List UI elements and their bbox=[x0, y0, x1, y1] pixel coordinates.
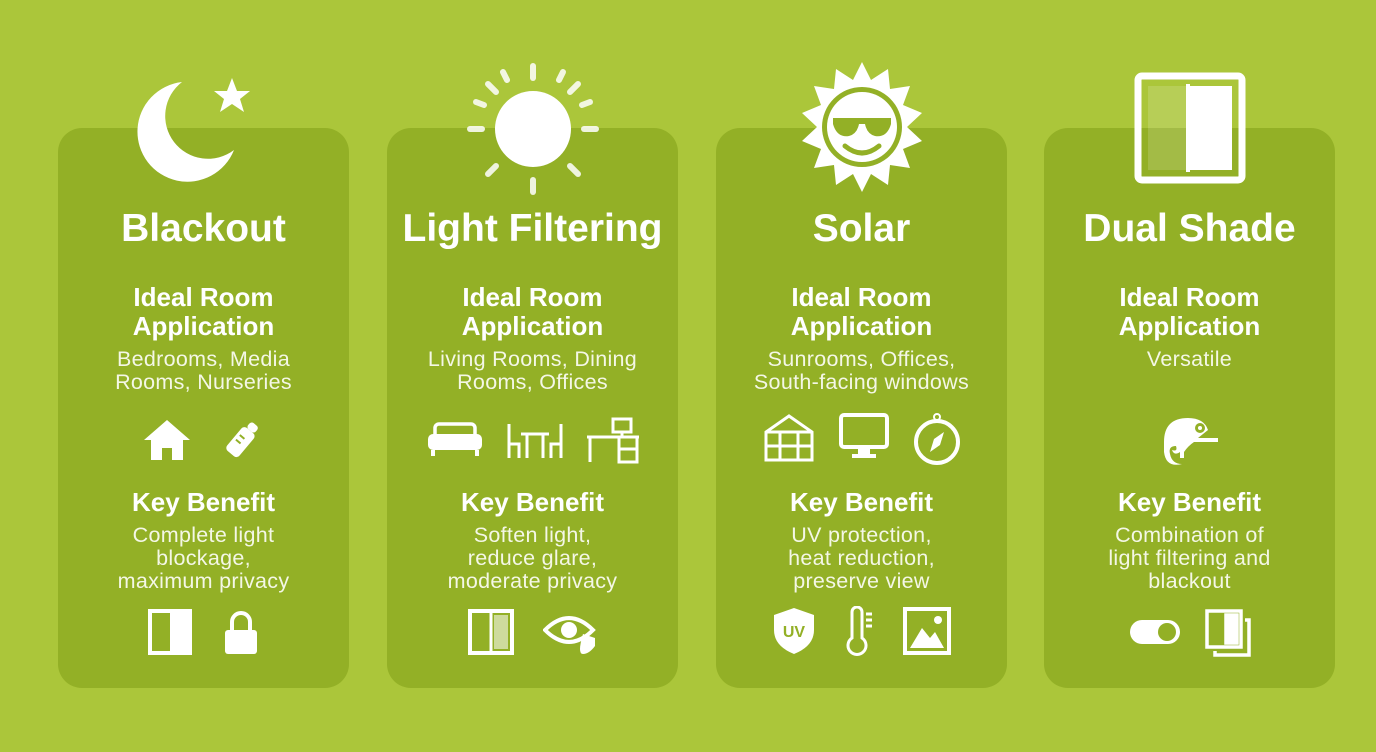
title: Dual Shade: Dual Shade bbox=[1083, 207, 1296, 250]
text: benefit: Soften light, bbox=[474, 523, 591, 547]
heading: ideal room: Application bbox=[133, 311, 274, 341]
text: rooms: Bedrooms, Media bbox=[117, 347, 290, 371]
heading: ideal room bbox=[1119, 282, 1260, 341]
icons: uv, thermometer, picture bbox=[774, 606, 951, 656]
heading: ideal room bbox=[791, 282, 932, 341]
icons: uv, thermometer, picture: UV bbox=[782, 624, 805, 641]
icon: sun bbox=[467, 63, 599, 195]
text: benefit bbox=[448, 523, 617, 593]
icons: greenhouse, monitor, compass bbox=[764, 413, 960, 465]
text: benefit: preserve view bbox=[793, 569, 930, 593]
text: benefit: light filtering and bbox=[1108, 546, 1271, 570]
icon: dual window bbox=[1134, 72, 1246, 184]
text: benefit: blackout bbox=[1148, 569, 1231, 593]
panel: dual shade bbox=[1044, 128, 1335, 688]
column: Light Filtering bbox=[387, 63, 678, 688]
column: Solar bbox=[716, 62, 1007, 688]
text: rooms bbox=[115, 347, 292, 394]
icon: chameleon bbox=[1164, 418, 1218, 465]
text: benefit: heat reduction, bbox=[788, 546, 935, 570]
heading: ideal room: Ideal Room bbox=[462, 282, 603, 312]
panel: light filtering bbox=[387, 128, 678, 688]
text: benefit: Complete light bbox=[133, 523, 274, 547]
text: rooms: Rooms, Nurseries bbox=[115, 370, 292, 394]
heading: ideal room: Ideal Room bbox=[791, 282, 932, 312]
text: rooms: South-facing windows bbox=[754, 370, 969, 394]
icons: shade, lock bbox=[148, 609, 257, 655]
heading: ideal room: Application bbox=[462, 311, 603, 341]
heading: ideal room bbox=[462, 282, 603, 341]
heading: ideal room: Ideal Room bbox=[133, 282, 274, 312]
heading: ideal room: Application bbox=[791, 311, 932, 341]
heading: key benefit: Key Benefit bbox=[1118, 487, 1261, 517]
text: benefit: reduce glare, bbox=[468, 546, 597, 570]
text: rooms: Rooms, Offices bbox=[457, 370, 608, 394]
title: Solar: Solar bbox=[813, 207, 910, 250]
text: benefit: UV protection, bbox=[791, 523, 932, 547]
text: rooms bbox=[754, 347, 969, 394]
column: Blackout bbox=[58, 78, 349, 688]
column: Dual Shade bbox=[1044, 72, 1335, 688]
text: benefit: Combination of bbox=[1115, 523, 1264, 547]
heading: key benefit: Key Benefit bbox=[461, 487, 604, 517]
heading: key benefit: Key Benefit bbox=[790, 487, 933, 517]
heading: ideal room bbox=[133, 282, 274, 341]
icon: sun with sunglasses bbox=[802, 62, 922, 192]
text: rooms: Versatile bbox=[1147, 347, 1232, 371]
icon: moon and star bbox=[137, 78, 250, 182]
title: Blackout: Blackout bbox=[121, 207, 286, 250]
heading: ideal room: Application bbox=[1119, 311, 1260, 341]
icons: toggle, layers bbox=[1130, 609, 1251, 657]
text: benefit: blockage, bbox=[156, 546, 251, 570]
icons: sofa, dining, desk bbox=[428, 418, 639, 464]
panel: blackout bbox=[58, 128, 349, 688]
text: benefit bbox=[118, 523, 290, 593]
icons: shade, eye bbox=[468, 609, 596, 655]
panel: solar bbox=[716, 128, 1007, 688]
title: Light Filtering: Light Filtering bbox=[403, 207, 662, 250]
text: benefit: moderate privacy bbox=[448, 569, 617, 593]
text: benefit bbox=[788, 523, 935, 593]
icons: house, bottle bbox=[144, 420, 258, 460]
text: benefit: maximum privacy bbox=[118, 569, 289, 593]
text: rooms bbox=[428, 347, 637, 394]
text: benefit bbox=[1108, 523, 1271, 593]
heading: ideal room: Ideal Room bbox=[1119, 282, 1260, 312]
text: rooms: Sunrooms, Offices, bbox=[768, 347, 955, 371]
text: rooms: Living Rooms, Dining bbox=[428, 347, 637, 371]
heading: key benefit: Key Benefit bbox=[132, 487, 275, 517]
